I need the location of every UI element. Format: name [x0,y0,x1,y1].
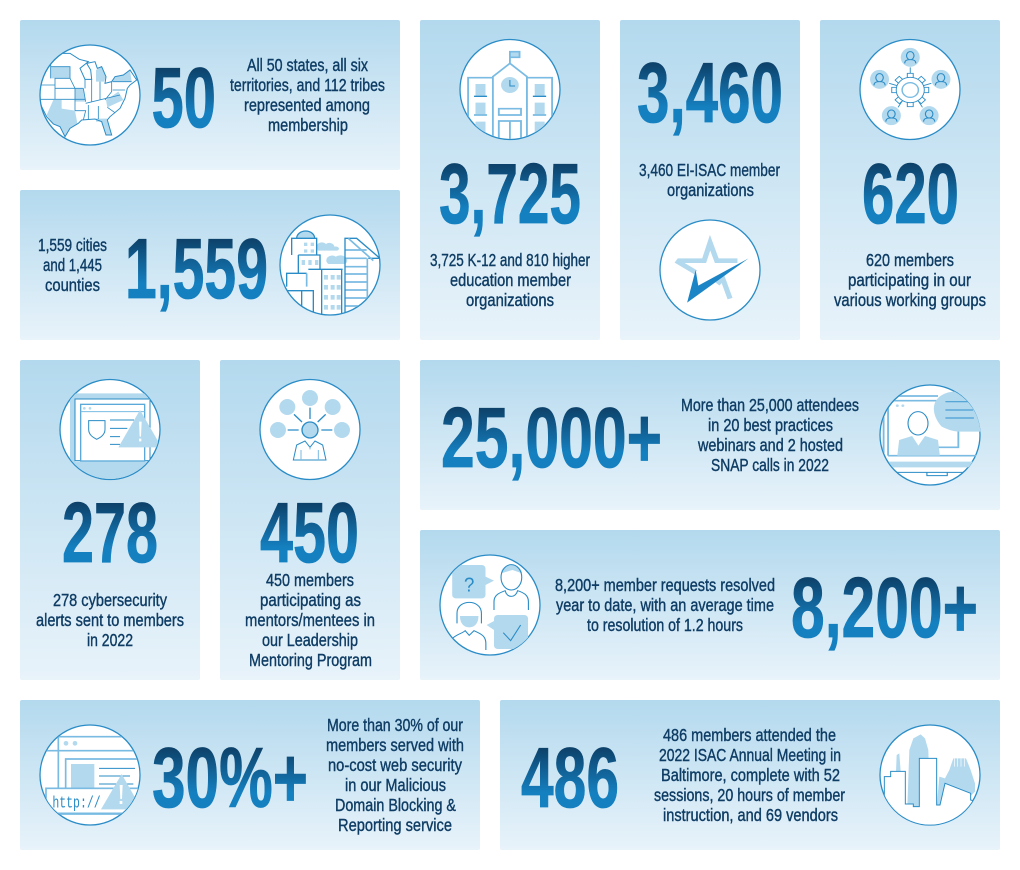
panel: 450 mentors [220,360,400,680]
text: annual meeting description: sessions, 20 hours of member [654,785,845,805]
text: K-12 description: 3,725 K-12 and 810 higher [430,250,590,270]
icon: Baltimore skyline [877,725,982,827]
text: mentors description: participating as [260,590,361,610]
text: web security description: Domain Blocking & [335,795,456,815]
text: annual meeting description: Baltimore, complete with 52 [661,765,840,785]
panel: 278 alerts [20,360,200,680]
text: states description: territories, and 112 tribes [230,75,385,95]
text: mentors description: our Leadership [262,630,358,650]
text: annual meeting description: instruction, and 69 vendors [663,805,838,825]
icon: support conversation [440,555,540,655]
text: cities description: and 1,445 [43,255,102,275]
text: alerts description: in 2022 [87,630,133,650]
number: 486: 486 [521,731,619,826]
text: K-12 description [430,250,590,310]
text: states description [230,55,385,135]
panel: 50 states [20,20,400,170]
panel: 3,460 EI-ISAC [620,20,800,340]
text: cities description: counties [45,275,100,295]
number: 30%+: 30%+ [152,731,308,826]
number: 450: 450 [260,486,359,581]
panel: 1,559 cities [20,190,400,340]
number: 3,725: 3,725 [439,147,581,242]
text: states description: represented among [244,95,370,115]
text: mentors description [245,570,375,670]
text: cities description: 1,559 cities [38,235,107,255]
icon: browser alert [60,380,162,483]
text: attendees description: More than 25,000 attendees [681,395,859,415]
number: 278: 278 [62,486,158,581]
text: EI-ISAC description [639,160,780,200]
text: attendees description: SNAP calls in 2022 [711,455,829,475]
text: annual meeting description: 2022 ISAC Annual Meeting in [659,745,841,765]
text: mentors description: Mentoring Program [249,650,372,670]
text: web security description [326,715,464,835]
text: requests description: 8,200+ member requests resolved [555,575,775,595]
text: web security description: members served with [326,735,464,755]
text: states description: membership [268,115,348,135]
icon: school building [460,40,560,142]
text: K-12 description: education member [450,270,571,290]
panel: 486 annual meeting [500,700,1000,850]
text: web security description: More than 30% of our [327,715,463,735]
text: alerts description [36,590,184,650]
text: web security description: in our Malicious [345,775,446,795]
text: working groups description: 620 members [866,250,954,270]
icon: support conversation: ? [464,575,474,596]
text: working groups description [834,250,986,310]
panel: 3,725 K-12 [420,20,600,340]
text: EI-ISAC description: organizations [667,180,754,200]
text: alerts description: alerts sent to members [36,610,184,630]
text: attendees description: in 20 best practices [708,415,833,435]
icon: mentor network [260,380,360,480]
text: working groups description: participating in our [848,270,971,290]
number: 25,000+: 25,000+ [441,391,662,486]
icon: people around gear [860,40,960,140]
number: 1,559: 1,559 [125,222,268,317]
text: web security description: no-cost web security [328,755,462,775]
icon: city skyline [280,215,380,317]
icon: webinar presenter [877,385,986,485]
panel: 620 working groups [820,20,1000,340]
text: alerts description: 278 cybersecurity [53,590,167,610]
number: 50: 50 [152,51,216,146]
panel: 30%+ web security [20,700,480,850]
number: 620: 620 [862,147,959,242]
icon: malicious URL warning [40,725,143,825]
text: states description: All 50 states, all six [247,55,368,75]
panel: 8,200+ requests [420,530,1000,680]
text: mentors description: mentors/mentees in [245,610,375,630]
icon: star with check [660,220,760,320]
text: requests description [555,575,775,635]
text: requests description: year to date, with an average time [556,595,774,615]
text: working groups description: various working groups [834,290,986,310]
text: annual meeting description [654,725,845,825]
text: attendees description: webinars and 2 hosted [697,435,843,455]
text: mentors description: 450 members [266,570,354,590]
number: 3,460: 3,460 [637,46,783,141]
icon: US map [38,45,140,145]
icon: malicious URL warning: http:// [52,794,101,813]
text: EI-ISAC description: 3,460 EI-ISAC member [639,160,780,180]
text: annual meeting description: 486 members attended the [663,725,836,745]
text: web security description: Reporting service [338,815,452,835]
text: requests description: to resolution of 1.2 hours [587,615,743,635]
text: cities description [38,235,107,295]
text: K-12 description: organizations [466,290,554,310]
text: attendees description [681,395,859,475]
panel: 25,000+ attendees [420,360,1000,510]
